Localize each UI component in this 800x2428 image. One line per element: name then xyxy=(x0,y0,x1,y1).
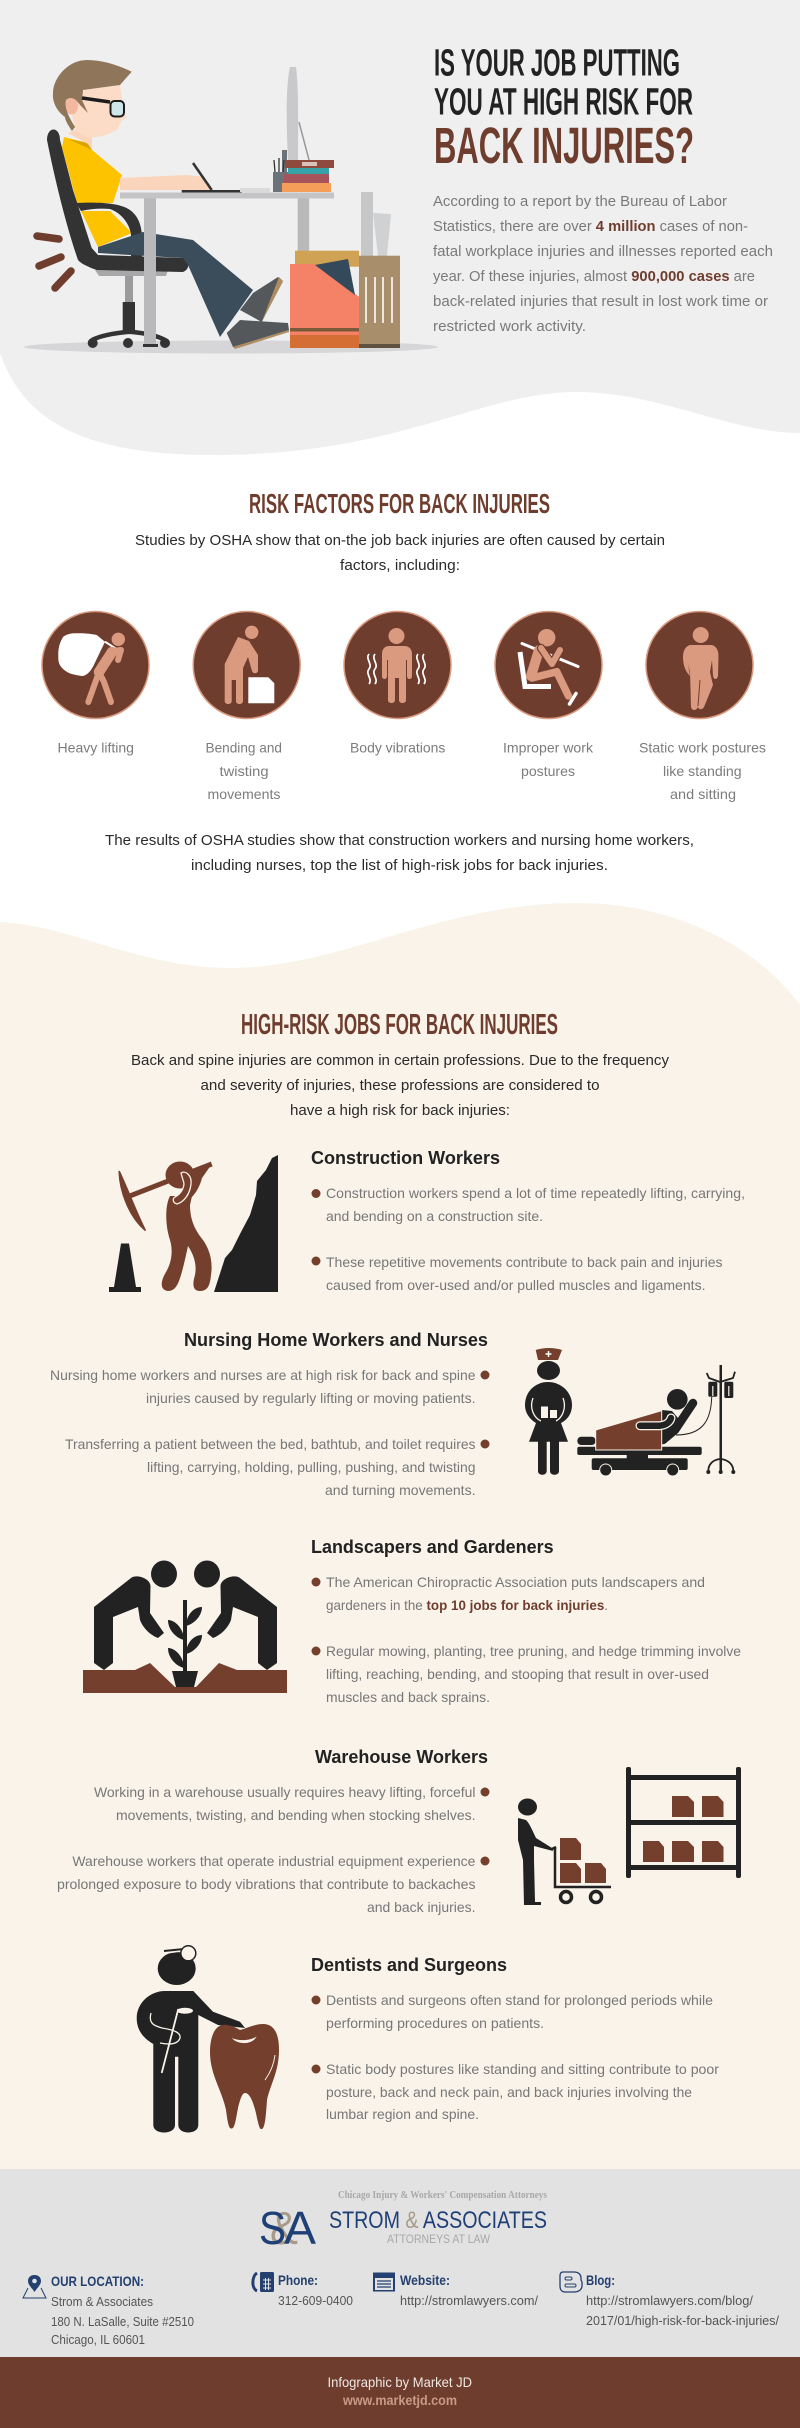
labels: risk factors: movements xyxy=(208,786,280,802)
heading: high-risk jobs: HIGH-RISK JOBS FOR BACK INJURIES xyxy=(241,1009,558,1041)
job: landscapers and gardeners: The American Chiropractic Association puts landscapers and xyxy=(326,1574,705,1590)
job: construction workers: and bending on a construction site. xyxy=(326,1208,543,1224)
job: construction workers xyxy=(311,1147,745,1293)
icon: bending and twisting xyxy=(193,612,300,718)
icon: construction worker xyxy=(109,1155,278,1292)
job: construction workers: Construction workers spend a lot of time repeatedly lifting, carrying, xyxy=(326,1185,745,1201)
icon: static postures xyxy=(646,612,753,718)
contact: location: Chicago, IL 60601 xyxy=(51,2332,145,2347)
job: landscapers and gardeners: Landscapers and Gardeners xyxy=(311,1536,554,1557)
labels: risk factors: like standing xyxy=(663,763,742,779)
icon: improper work postures xyxy=(495,612,602,718)
labels: risk factors: postures xyxy=(521,763,575,779)
labels: risk factors: and sitting xyxy=(670,786,736,802)
high-risk intro: Back and spine injuries are common in certain professions. Due to the frequency xyxy=(131,1053,670,1069)
panel: high-risk jobs background xyxy=(0,903,800,2170)
job: landscapers and gardeners: lifting, reaching, bending, and stooping that result in over-used xyxy=(326,1666,709,1682)
logo: Strom & Associates: & xyxy=(270,2202,298,2254)
icon: body vibrations xyxy=(344,612,451,718)
contact: blog: 2017/01/high-risk-for-back-injuries/ xyxy=(586,2313,779,2328)
intro paragraph xyxy=(433,194,773,335)
intro paragraph: Statistics, there are over 4 million cases of non- xyxy=(433,219,748,235)
title xyxy=(434,43,694,174)
heading: risk factors: RISK FACTORS FOR BACK INJURIES xyxy=(249,488,550,519)
job: warehouse workers: Working in a warehouse usually requires heavy lifting, forceful xyxy=(94,1784,476,1800)
contact: phone: 312-609-0400 xyxy=(278,2293,353,2308)
intro paragraph: back-related injuries that result in lost work time or xyxy=(433,294,768,310)
job: warehouse workers: and back injuries. xyxy=(367,1899,476,1915)
contact: blog xyxy=(560,2272,779,2328)
logo: Strom & Associates: A xyxy=(284,2202,316,2254)
credits text: www.marketjd.com xyxy=(342,2392,457,2408)
icon: nurse and patient xyxy=(525,1348,735,1476)
logo: Strom & Associates: S xyxy=(259,2202,286,2254)
contact: location: 180 N. LaSalle, Suite #2510 xyxy=(51,2314,194,2329)
job: warehouse workers: Warehouse workers that operate industrial equipment experience xyxy=(72,1853,476,1869)
logo: Strom & Associates xyxy=(259,2190,547,2254)
contact: phone xyxy=(253,2272,353,2308)
OSHA results text xyxy=(105,833,694,874)
contact: location: Strom & Associates xyxy=(51,2294,153,2309)
illustration: office worker at desk xyxy=(24,60,438,354)
logo: Strom & Associates: Chicago Injury & Workers' Compensation Attorneys xyxy=(338,2190,547,2201)
logo: Strom & Associates: ATTORNEYS AT LAW xyxy=(387,2234,490,2246)
labels: risk factors: Heavy lifting xyxy=(58,740,134,756)
contact: website xyxy=(373,2272,538,2308)
labels: risk factors: Improper work xyxy=(503,740,594,756)
job: dentists and surgeons: lumbar region and spine. xyxy=(326,2106,479,2122)
job: dentists and surgeons: Dentists and surgeons often stand for prolonged periods while xyxy=(326,1992,713,2008)
credits text: Infographic by Market JD xyxy=(328,2374,472,2390)
credits text xyxy=(328,2374,472,2408)
job: landscapers and gardeners: Regular mowing, planting, tree pruning, and hedge trimming involve xyxy=(326,1643,741,1659)
job: dentists and surgeons xyxy=(311,1954,719,2122)
OSHA results text: The results of OSHA studies show that construction workers and nursing home workers, xyxy=(105,833,694,849)
labels: risk factors: Static work postures xyxy=(639,740,766,756)
high-risk intro: have a high risk for back injuries: xyxy=(290,1103,510,1119)
job: landscapers and gardeners: muscles and back sprains. xyxy=(326,1689,490,1705)
icon: heavy lifting xyxy=(42,612,149,718)
labels: risk factors xyxy=(58,740,766,802)
job: nursing home workers: Nursing Home Workers and Nurses xyxy=(184,1329,488,1350)
contact: location: OUR LOCATION: xyxy=(51,2273,144,2289)
labels: risk factors: twisting xyxy=(220,763,268,779)
job: nursing home workers: Nursing home workers and nurses are at high risk for back and spine xyxy=(50,1367,476,1383)
job: warehouse workers: prolonged exposure to body vibrations that contribute to backaches xyxy=(57,1876,475,1892)
labels: risk factors: Bending and xyxy=(206,740,282,756)
risk factors intro xyxy=(135,533,665,574)
job: dentists and surgeons: Static body postures like standing and sitting contribute to poor xyxy=(326,2061,719,2077)
job: nursing home workers: Transferring a patient between the bed, bathtub, and toilet requires xyxy=(65,1436,476,1452)
panel: credits bar xyxy=(0,2357,800,2428)
job: dentists and surgeons: performing procedures on patients. xyxy=(326,2015,544,2031)
job: nursing home workers: lifting, carrying, holding, pulling, pushing, and twisting xyxy=(147,1459,476,1475)
job: warehouse workers xyxy=(57,1746,490,1915)
panel: footer contact xyxy=(0,2169,800,2357)
OSHA results text: including nurses, top the list of high-risk jobs for back injuries. xyxy=(191,858,608,874)
job: landscapers and gardeners xyxy=(311,1536,741,1705)
intro paragraph: According to a report by the Bureau of Labor xyxy=(433,194,727,210)
icon: warehouse worker and shelves xyxy=(518,1767,741,1905)
intro paragraph: restricted work activity. xyxy=(433,319,586,335)
job: nursing home workers: injuries caused by regularly lifting or moving patients. xyxy=(146,1390,476,1406)
job: landscapers and gardeners: gardeners in the top 10 jobs for back injuries. xyxy=(326,1597,608,1613)
contact: blog: http://stromlawyers.com/blog/ xyxy=(586,2293,753,2308)
icon: dentist and tooth xyxy=(137,1946,279,2132)
intro paragraph: year. Of these injuries, almost 900,000 cases are xyxy=(433,269,755,285)
intro paragraph: fatal workplace injuries and illnesses reported each xyxy=(433,244,773,260)
contact: location xyxy=(23,2273,194,2347)
icon: gardeners xyxy=(83,1560,287,1693)
job: nursing home workers: and turning movements. xyxy=(325,1482,476,1498)
job: dentists and surgeons: posture, back and neck pain, and back injuries involving the xyxy=(326,2084,692,2100)
header background wave xyxy=(0,0,800,455)
labels: risk factors: Body vibrations xyxy=(350,740,445,756)
contact: website: http://stromlawyers.com/ xyxy=(400,2293,538,2308)
high-risk intro xyxy=(131,1053,670,1119)
contact: phone: Phone: xyxy=(278,2272,318,2288)
risk factors intro: factors, including: xyxy=(340,558,460,574)
job: nursing home workers xyxy=(50,1329,490,1498)
job: construction workers: These repetitive movements contribute to back pain and injuries xyxy=(326,1254,722,1270)
job: construction workers: caused from over-used and/or pulled muscles and ligaments. xyxy=(326,1277,706,1293)
job: dentists and surgeons: Dentists and Surgeons xyxy=(311,1954,507,1975)
contact: website: Website: xyxy=(400,2272,450,2288)
logo: Strom & Associates: STROM & ASSOCIATES xyxy=(329,2207,547,2234)
job: construction workers: Construction Workers xyxy=(311,1147,500,1168)
job: warehouse workers: movements, twisting, and bending when stocking shelves. xyxy=(116,1807,476,1823)
job: warehouse workers: Warehouse Workers xyxy=(315,1746,488,1767)
risk factors intro: Studies by OSHA show that on-the job back injuries are often caused by certain xyxy=(135,533,665,549)
contact: blog: Blog: xyxy=(586,2272,615,2288)
high-risk intro: and severity of injuries, these professions are considered to xyxy=(200,1078,600,1094)
